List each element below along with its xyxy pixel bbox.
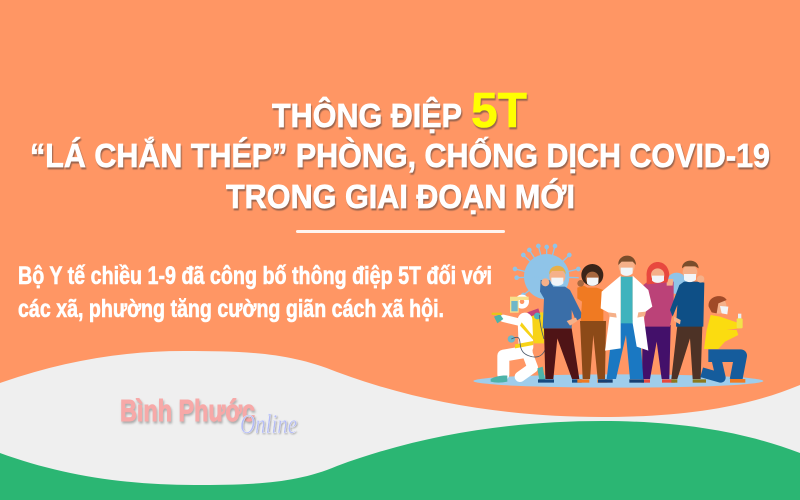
title line 3: TRONG GIAI ĐOẠN MỚI: [226, 178, 575, 215]
description line 2: các xã, phường tăng cường giãn cách xã hội.: [18, 295, 444, 323]
figure: man in navy sweater: [670, 261, 706, 383]
figure: kneeling man with sanitizer: [702, 296, 745, 383]
divider: [296, 230, 505, 233]
illustration: people in masks: [473, 244, 763, 388]
figure: woman in magenta sweater: [641, 262, 675, 383]
figure: man in blue sweater: [538, 266, 583, 383]
figure: woman in orange sweater: [577, 264, 607, 383]
figure: doctor in white coat: [598, 256, 652, 383]
icon: virus small: [666, 273, 687, 294]
title line 1: THÔNG ĐIỆP: [272, 96, 462, 134]
logo text: Bình Phước: Bình Phước: [120, 393, 255, 428]
icon: virus large: [513, 244, 580, 299]
wave: green: [0, 421, 800, 500]
title: [30, 84, 770, 215]
logo text: Online: Online: [240, 409, 297, 439]
description text: [18, 262, 492, 323]
highlight: 5T: 5T: [471, 84, 527, 138]
logo: Bình Phước Online: [120, 393, 297, 439]
ground ellipse: [473, 374, 763, 388]
description line 1: Bộ Y tế chiều 1-9 đã công bố thông điệp 5T đối với: [18, 262, 492, 290]
wave: light grey: [0, 351, 800, 500]
figure: sprayer in protective suit: [491, 297, 545, 383]
